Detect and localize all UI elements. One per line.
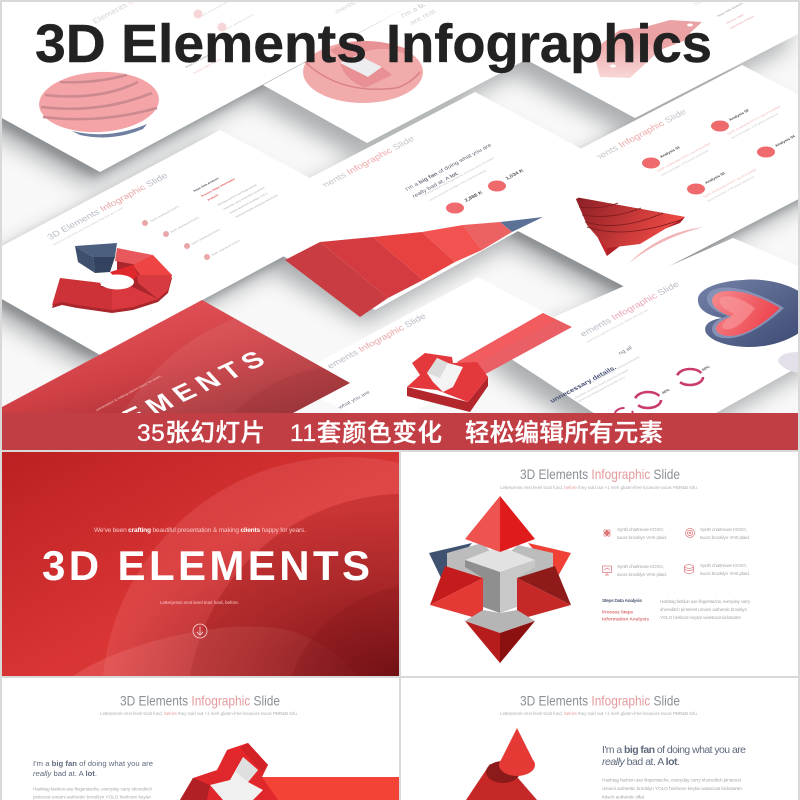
corner page curl [778,352,800,373]
tagline: We've been crafting beautiful presentation & making clients happy for years. [94,527,306,534]
card: heart slide [512,238,798,413]
gauge labels [661,365,711,395]
lead text: I'm a big fan of doing what you are [602,744,746,756]
card: cross slide: what you are [337,390,371,411]
card: red title slide [2,300,350,413]
analysis bullets: Analysis 04 [774,134,797,148]
feature text [617,527,750,577]
slide heading text: ements Infographic Slide [325,312,428,370]
card: stats slide with stairs: Hashtag fashion axe fingerstache, everyday carry shoreditch [422,156,495,197]
icon: ring gauges [615,369,703,420]
icon: presentation board [602,566,612,575]
slide small text: Synth chartreuse KOXO, [149,204,181,223]
banner text [137,419,663,447]
panel: star diagram slide [401,452,798,676]
icon: layered heart [698,280,800,347]
icon: cross with red band [180,743,399,800]
slide heading text: 3D Elements Infographic Slide [45,171,169,241]
panel: red title slide [2,452,399,676]
slide small text: Synth chartreuse KOXO, [199,0,231,18]
card: heart slide: Hashtag fashion axe fingerstache everyday carry [566,375,626,409]
analysis bullets: Analysis 01 [659,146,681,159]
card: cross slide [328,277,572,412]
slide small text: Synth chartreuse KOXO, [190,227,222,246]
slide heading text: ements Infographic Slide [578,280,681,338]
feature text: tacos brooklyn VHS plaid. [617,535,667,540]
slide small text: Analysis [206,193,220,202]
analysis bullets: Synth chartreuse KOXO, tacos brooklyn [656,142,712,173]
slide body text: really bad at. A lot. [412,171,461,199]
icon: circular arrow [52,243,172,313]
feature text: tacos brooklyn VHS plaid. [700,535,750,540]
card: heart slide: unnecessary details. [549,365,618,404]
icon: red stairs [285,217,543,317]
icon: cross with red band [407,313,572,412]
gauge labels: 80% [701,365,711,372]
subheading: Letterpress next level trust fund, before they sold out +1 meh gluten-free locavore tacos PBR&B tofu. [500,485,698,490]
lead text: really bad at. A lot. [33,769,97,778]
analysis heading: Process Steps [602,610,633,616]
slide small text: Steps Data Analysis [184,52,212,69]
stat: 1,034 K [488,168,525,192]
analysis bullets: tacos brooklyn VHS plaid waistcoat [660,149,709,177]
icon: scroll-down circle [193,624,207,638]
slide title: 3D ELEMENTS [42,542,370,589]
slide small text: Synth chartreuse KOXO, [169,215,201,234]
paragraph: umami authentic brooklyn YOLO heirloom keytar waistcoat kickstarter. [602,786,743,792]
title: 3D Elements [35,14,367,74]
analysis paragraph: shoreditch pinterest umami authentic brooklyn [660,607,747,612]
decorative circles [103,457,399,676]
panel: isometric slide collage [2,2,798,413]
analysis paragraph: YOLO heirloom keytar waistcoat kickstarter [660,615,741,620]
banner text: 35张幻灯片 [137,419,265,447]
card: stats slide with stairs [284,92,599,317]
paragraph [602,778,743,800]
analysis heading [602,598,649,622]
slide small text: Process Steps [725,13,745,25]
analysis heading: Information Analysis [602,616,649,622]
panel: cone diagram slide [401,678,798,800]
card: pink arrow slide [415,0,800,118]
slide small text: Synth chartreuse KOXO, [224,12,256,31]
icons: list bullets [142,220,210,260]
paragraph: pinterest umami authentic brooklyn YOLO heirloom keytar [33,794,151,800]
slide small text: Steps Data Analysis [192,176,220,193]
card: arrow donut slide: Letterpress next level trust fund, before they sold out +1 meh [51,206,125,247]
slide body text [400,4,437,24]
slide small text: Synth chartreuse KOXO, [210,238,242,257]
slide small text: Information Analysis [729,14,756,30]
subheading: Letterpress next level trust fund, before they sold out +1 meh gluten-free locavore tacos PBR&B tofu. [500,711,698,716]
feature text: tacos brooklyn VHS plaid. [617,572,667,577]
analysis bullets: tacos brooklyn VHS plaid waistcoat [706,175,755,203]
heading: 3D Elements Infographic Slide [120,692,280,708]
slide small text [149,176,279,257]
icon: pink block arrow [593,20,702,78]
banner [2,413,798,450]
icon: pink swoosh shadow [628,227,704,264]
icon: target [686,528,694,538]
slide small text [693,2,754,29]
tilted tagline: presentation & making clients happy for years. [95,374,162,412]
feature text: Synth chartreuse KOXO, [617,527,664,532]
lead text [602,744,746,768]
card: analysis slide with pyramid [518,65,798,286]
card: heart slide: shoreditch pinterest umami authentic brooklyn [573,368,630,400]
icon: atom [603,529,611,537]
feature text: tacos brooklyn VHS plaid. [700,571,750,576]
subtitle: Letterpress next level trust fund, before. [160,600,239,605]
icon: pale pie [303,41,423,103]
analysis bullets: Synth chartreuse KOXO, tacos brooklyn [702,168,758,199]
icon: striped sphere [38,69,160,137]
card: striped sphere slide [0,0,420,172]
lead text: really bad at. A lot. [602,756,680,768]
icon: stacked layers [684,565,694,574]
slide body text: ng all [618,345,634,356]
lead text: I'm a big fan of doing what you are [33,759,153,768]
paragraph: Hashtag fashion axe fingerstache, everyday carry shoreditch pinterest [602,778,742,784]
panel: cross diagram slide [2,678,399,800]
title: Infographics [386,14,712,74]
slide body text: I'm a big fan of doing what you are [405,143,493,192]
paragraph [33,786,152,800]
card shadows [2,6,798,413]
analysis bullets: Analysis 02 [728,109,750,122]
title [35,14,712,74]
card: heart slide: YOLO heirloom keytar waistcoat kickstarter [588,355,641,385]
card: pie slide [263,2,522,143]
analysis paragraph [660,599,751,620]
card: arrow donut slide [2,130,326,355]
feature text: Synth chartreuse KOXO, [617,564,664,569]
analysis bullets: Analysis 03 [704,172,726,185]
analysis bullets: tacos brooklyn VHS plaid waistcoat [730,112,779,140]
icon: red cone [466,728,537,800]
slide small text: Hashtag fashion axe fingerstache [216,183,258,207]
analysis bullets [642,105,797,203]
slide small text: Process Steps Analysis [192,57,222,75]
gauge labels: 80% [661,388,671,395]
slide small text: heirloom keytar waistcoat kickstarter [234,193,279,219]
banner text: 11套颜色变化 [290,419,442,447]
paragraph: Hashtag fashion axe fingerstache, everyday carry shoreditch [33,786,152,792]
card: heart slide: Letterpress next level trust fund, before they sold out [585,308,649,344]
card: stats slide with stairs: umami authentic brooklyn YOLO heirloom keytar [428,169,487,202]
analysis bullets: Synth chartreuse KOXO, tacos brooklyn [726,105,782,136]
heading: 3D Elements Infographic Slide [520,692,680,708]
slide small text: everyday carry shoreditch pinterest [222,186,266,211]
stat: 1,034 K: 1,034 K [505,168,525,181]
slide heading text: ments Infographic Slide [318,134,416,190]
slide small text: Steps Data Analysis [716,1,744,18]
feature text: Synth chartreuse KOXO, [700,527,747,532]
slide heading text: ments Infographic Slide [590,107,688,163]
lead text [33,759,153,778]
stat: 2,888 K [446,190,484,214]
slide small text: umami authentic brooklyn YOLO [228,191,269,215]
slide small text: Process Steps Information [200,177,236,198]
analysis heading: Steps Data Analysis [602,598,642,604]
icon: layered red pyramid [575,197,685,256]
subheading: Letterpress next level trust fund, before they sold out +1 meh gluten-free locavore tacos PBR&B tofu. [100,711,298,716]
analysis paragraph: Hashtag fashion axe fingerstache, everyday carry [660,599,751,604]
banner text: 轻松编辑所有元素 [465,419,663,447]
heading: 3D Elements Infographic Slide [520,466,680,482]
tilted title: EMENTS [116,346,271,430]
chart: 3D star [429,496,571,663]
stat: 2,888 K: 2,888 K [464,190,484,203]
feature text: Synth chartreuse KOXO, [700,563,747,568]
slide small text [184,0,256,75]
